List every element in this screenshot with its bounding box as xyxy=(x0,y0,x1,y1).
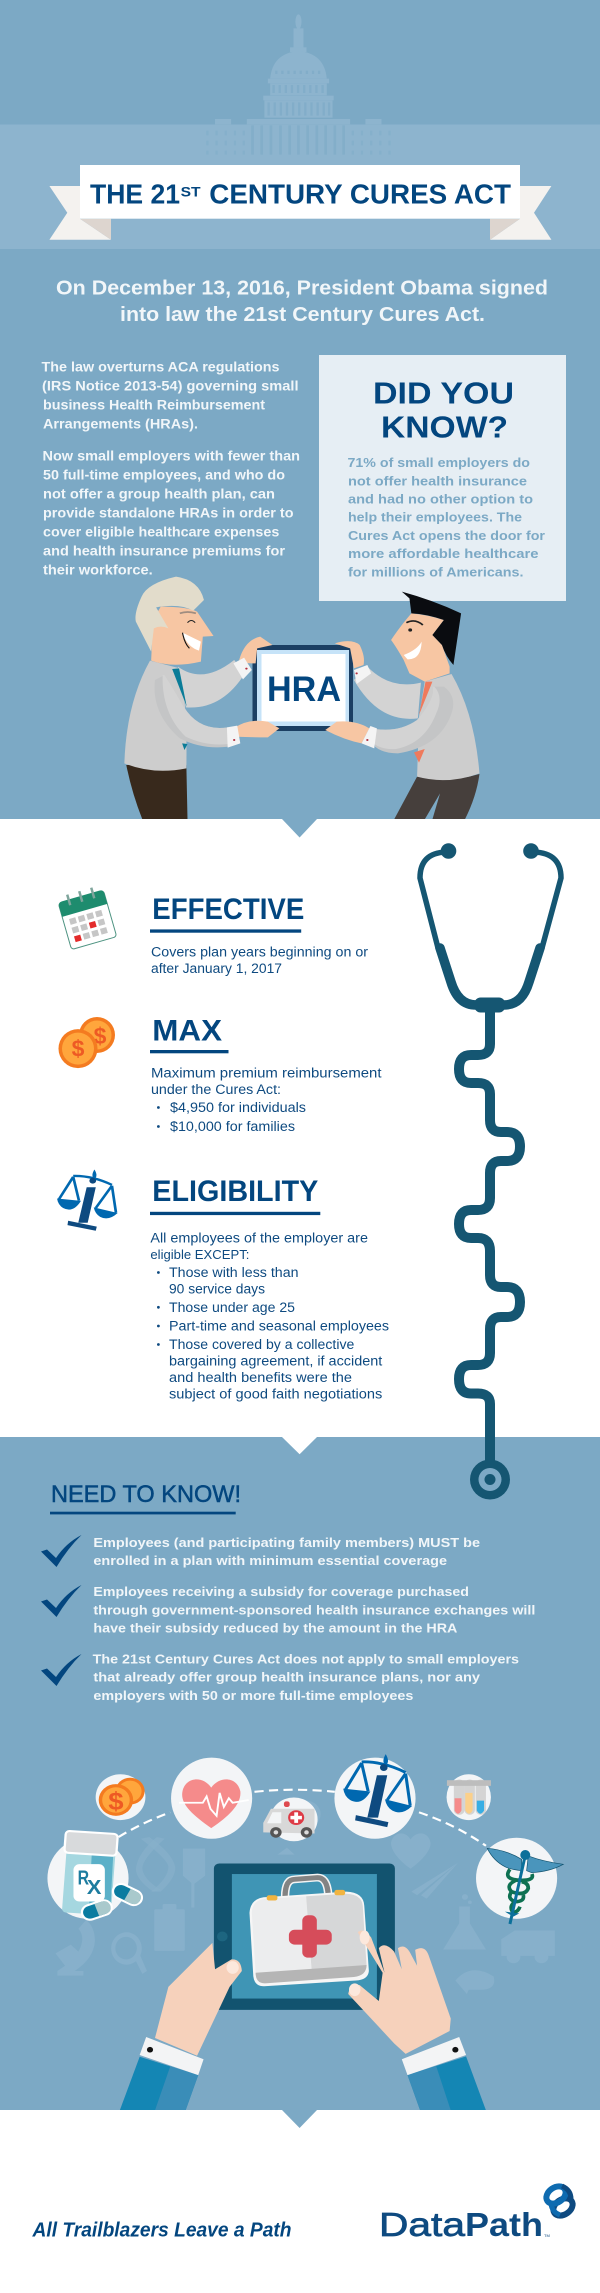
icon: test tubes xyxy=(447,1774,491,1820)
text: max reimbursement xyxy=(151,1066,382,1134)
text: eligibility: Part-time and seasonal employees xyxy=(169,1319,389,1334)
left man xyxy=(124,577,245,819)
icon: right hand and sleeve xyxy=(348,1930,486,2110)
text block: law overview xyxy=(42,360,300,577)
text: need to know 1: enrolled in a plan with minimum essential coverage xyxy=(93,1554,447,1568)
title text: THE 21 xyxy=(90,178,180,209)
icon: calendar xyxy=(57,885,117,950)
text block: law overview: cover eligible healthcare expenses xyxy=(43,524,279,539)
dashed arc xyxy=(119,1790,486,1846)
did you know text xyxy=(348,455,545,579)
heading: need to know: NEED TO KNOW! xyxy=(51,1481,241,1508)
did you know text: help their employees. The xyxy=(348,510,522,525)
text: eligibility: All employees of the employer are xyxy=(150,1230,368,1245)
icon: left hand and sleeve xyxy=(120,1943,242,2110)
text: effective dates: Covers plan years beginning on or xyxy=(151,945,369,960)
did you know text: not offer health insurance xyxy=(348,473,527,488)
icon: capitol building xyxy=(207,14,390,155)
text: effective dates xyxy=(151,945,369,976)
text: max reimbursement: $4,950 for individuals xyxy=(170,1100,306,1115)
text block: law overview: Arrangements (HRAs). xyxy=(43,417,198,432)
text: max reimbursement: Maximum premium reimbursement xyxy=(151,1066,382,1080)
logo: DataPath wordmark xyxy=(379,2206,550,2243)
did you know heading: DID YOU xyxy=(373,375,514,410)
text block: law overview: (IRS Notice 2013-54) governing small xyxy=(42,379,298,394)
icon: stethoscope xyxy=(420,843,561,1500)
icon: caduceus xyxy=(476,1838,563,1924)
faint background icons xyxy=(55,1801,555,1994)
icon: check mark 2 xyxy=(41,1585,82,1617)
icon: rx bottle: X xyxy=(87,1876,102,1899)
tablet xyxy=(214,1863,395,2010)
panel: white details section xyxy=(0,819,600,1437)
text block: law overview: provide standalone HRAs in order to xyxy=(43,505,294,520)
text: eligibility: and health benefits were the xyxy=(169,1370,352,1385)
tagline: All Trailblazers Leave a Path xyxy=(32,2220,291,2242)
text: need to know 2 xyxy=(93,1585,535,1635)
did you know text: Cures Act opens the door for xyxy=(348,528,545,543)
icon: check mark 3 xyxy=(41,1654,82,1686)
title text: CENTURY CURES ACT xyxy=(209,178,511,209)
text: eligibility xyxy=(150,1230,389,1401)
text: need to know 2: through government-sponsored health insurance exchanges will xyxy=(93,1603,535,1617)
did you know text: for millions of Americans. xyxy=(348,564,524,579)
intro heading xyxy=(56,277,548,326)
text: need to know 3: employers with 50 or more full-time employees xyxy=(93,1689,413,1703)
illustration: tablet and health icons xyxy=(47,1754,563,2110)
did you know text: more affordable healthcare xyxy=(348,546,538,561)
text: need to know 3: that already offer group health insurance plans, nor any xyxy=(93,1671,480,1685)
header band xyxy=(0,124,600,249)
illustration: two men holding HRA board xyxy=(124,577,479,819)
text: need to know 1 xyxy=(93,1536,480,1568)
logo: DataPath wordmark: Path xyxy=(465,2206,543,2243)
text: max reimbursement: under the Cures Act: xyxy=(151,1082,281,1097)
icon: coins: $ xyxy=(108,1786,124,1815)
intro heading: On December 13, 2016, President Obama signed xyxy=(56,277,548,300)
text block: law overview: Now small employers with fewer than xyxy=(42,448,300,463)
text block: law overview: their workforce. xyxy=(43,562,153,577)
did you know heading xyxy=(373,375,514,444)
text: eligibility: bargaining agreement, if accident xyxy=(169,1354,383,1369)
did you know text: and had no other option to xyxy=(348,491,533,506)
hands and cuffs xyxy=(227,637,377,748)
text: eligibility: eligible EXCEPT: xyxy=(150,1247,249,1262)
title ribbon xyxy=(49,165,551,240)
text: need to know 2: have their subsidy reduced by the amount in the HRA xyxy=(93,1621,457,1635)
text: max reimbursement: $10,000 for families xyxy=(170,1119,295,1134)
logo: DataPath wordmark: Data xyxy=(379,2206,466,2243)
text: eligibility: Those covered by a collective xyxy=(169,1337,354,1352)
text: need to know 3: The 21st Century Cures Act does not apply to small employers xyxy=(93,1652,519,1666)
icon: heart xyxy=(171,1758,252,1839)
logo: knot xyxy=(543,2183,576,2219)
icon: rx bottle xyxy=(47,1831,146,1923)
text: eligibility: 90 service days xyxy=(169,1282,265,1296)
text block: law overview: and health insurance premiums for xyxy=(43,543,286,558)
heading: effective: EFFECTIVE xyxy=(152,893,304,926)
text: eligibility: Those with less than xyxy=(169,1265,298,1280)
text: need to know 3 xyxy=(93,1652,519,1703)
panel: did you know xyxy=(319,355,566,601)
text: need to know 2: Employees receiving a subsidy for coverage purchased xyxy=(93,1585,469,1599)
HRA board: HRA xyxy=(267,670,341,709)
text: eligibility: subject of good faith negotiations xyxy=(169,1386,383,1401)
text block: law overview: not offer a group health plan, can xyxy=(43,486,275,501)
did you know heading: KNOW? xyxy=(381,409,508,444)
icon: coins xyxy=(58,1017,115,1068)
icon: coins: $ xyxy=(72,1036,85,1062)
HRA board xyxy=(252,645,353,731)
icon: coins xyxy=(96,1774,145,1820)
panel: footer xyxy=(0,2110,600,2293)
text: eligibility: Those under age 25 xyxy=(169,1300,295,1315)
heading: max: MAX xyxy=(152,1014,222,1047)
icon: coins: $ xyxy=(94,1023,107,1049)
logo: DataPath wordmark: TM xyxy=(544,2233,550,2238)
icon: scales of justice xyxy=(57,1169,118,1231)
did you know text: 71% of small employers do xyxy=(348,455,530,470)
white notch xyxy=(282,1437,317,1454)
icon: check mark 1 xyxy=(41,1535,82,1567)
text block: law overview: business Health Reimbursement xyxy=(43,398,266,413)
icon: rx bottle: R xyxy=(78,1866,89,1889)
text: need to know 1: Employees (and participating family members) MUST be xyxy=(93,1536,480,1550)
text block: law overview: The law overturns ACA regulations xyxy=(42,360,280,375)
text block: law overview: 50 full-time employees, and who do xyxy=(43,467,285,482)
text: effective dates: after January 1, 2017 xyxy=(151,961,282,976)
icon: medical kit xyxy=(249,1878,369,1986)
heading: eligibility: ELIGIBILITY xyxy=(152,1175,318,1208)
title text: ST xyxy=(181,184,201,200)
icon: scales xyxy=(334,1754,416,1839)
icon: ambulance xyxy=(263,1797,318,1841)
intro heading: into law the 21st Century Cures Act. xyxy=(120,303,485,326)
right man xyxy=(354,592,479,819)
